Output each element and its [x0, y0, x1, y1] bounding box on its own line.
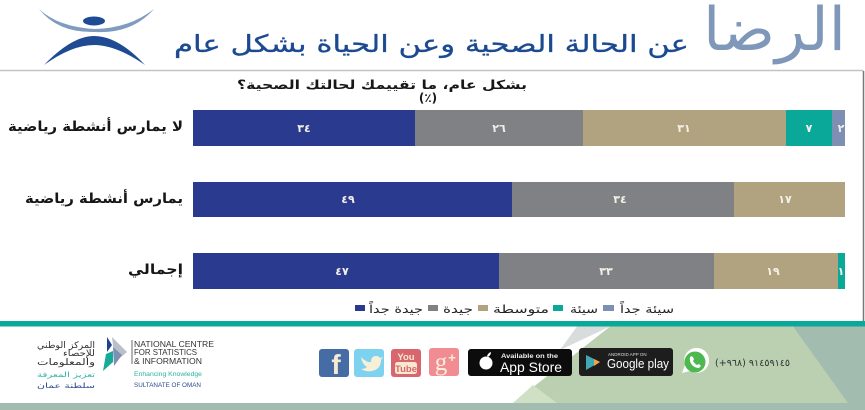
legend: سيئة	[570, 302, 598, 316]
icon: google plus: +	[448, 350, 456, 365]
icon: facebook	[319, 349, 349, 380]
badge: Google Play: Google play	[607, 356, 669, 371]
row: does not exercise: لا يمارس أنشطة رياضية	[8, 117, 183, 135]
English organisation name: FOR STATISTICS	[134, 348, 197, 357]
row: total: ٤٧	[335, 265, 349, 278]
icon: google plus: g	[435, 349, 448, 376]
icon: youtube: Tube	[395, 364, 417, 375]
Arabic organisation name: المركز الوطني	[37, 341, 95, 351]
row: does not exercise: ٢٦	[492, 122, 506, 135]
chart heading	[237, 77, 527, 105]
English organisation name: NATIONAL CENTRE	[134, 340, 214, 349]
icon: google plus	[429, 348, 459, 376]
row: total: ٣٣	[599, 265, 613, 278]
badge: App Store: Available on the	[501, 353, 558, 360]
chart heading: (٪)	[419, 91, 437, 105]
Arabic organisation name	[37, 341, 95, 390]
row: total	[128, 253, 845, 289]
Arabic organisation name: تعزيز المعرفة	[37, 371, 95, 379]
row: exercises: يمارس أنشطة رياضية	[25, 189, 183, 207]
legend: جيدة جداً	[369, 300, 423, 316]
bar chart	[8, 110, 845, 289]
legend: متوسطة	[493, 302, 549, 317]
badge: App Store	[468, 349, 572, 376]
legend: سيئة جداً	[620, 300, 674, 316]
Arabic organisation name: والمعلومات	[37, 358, 95, 368]
English organisation name: & INFORMATION	[134, 357, 202, 366]
legend	[355, 300, 674, 317]
icon: facebook: f	[331, 349, 341, 380]
row: exercises: ١٧	[778, 193, 792, 206]
row: total: إجمالي	[128, 262, 183, 278]
row: total: ١٩	[766, 265, 780, 278]
footer background	[0, 321, 865, 410]
English organisation name: Enhancing Knowledge	[134, 371, 202, 378]
icon: youtube	[391, 349, 421, 377]
English organisation name	[134, 340, 214, 389]
row: does not exercise: ٣١	[677, 122, 691, 135]
row: does not exercise: ٣٤	[297, 122, 311, 135]
row: does not exercise: ٢	[838, 122, 845, 135]
title	[174, 0, 846, 65]
chart frame	[0, 70, 864, 72]
badge: App Store: App Store	[500, 359, 562, 375]
row: total: ١	[838, 265, 844, 278]
logo mark	[103, 337, 127, 371]
Arabic organisation name: للإحصاء	[63, 349, 95, 359]
badge: Google Play	[579, 348, 673, 376]
icon: whatsapp	[682, 348, 709, 373]
icon: youtube: You	[397, 352, 415, 363]
row: exercises: ٣٤	[613, 193, 627, 206]
whatsapp number: (+٩٦٨) ٩١٤٥٩١٤٥	[715, 358, 790, 369]
badge: Google Play: ANDROID APP ON	[608, 352, 647, 357]
title: عن الحالة الصحية وعن الحياة بشكل عام	[174, 30, 689, 58]
NCSI logo	[37, 337, 214, 390]
row: does not exercise: ٧	[806, 122, 813, 135]
English organisation name: SULTANATE OF OMAN	[134, 382, 201, 389]
Arabic organisation name: سلطنة عمان	[37, 382, 95, 390]
row: does not exercise	[8, 110, 845, 146]
row: exercises: ٤٩	[341, 193, 355, 206]
chart heading: بشكل عام، ما تقييمك لحالتك الصحية؟	[237, 77, 527, 93]
icon: twitter	[354, 349, 384, 377]
legend: جيدة	[443, 302, 473, 316]
logo: emblem	[39, 9, 154, 65]
row: exercises	[25, 182, 845, 217]
